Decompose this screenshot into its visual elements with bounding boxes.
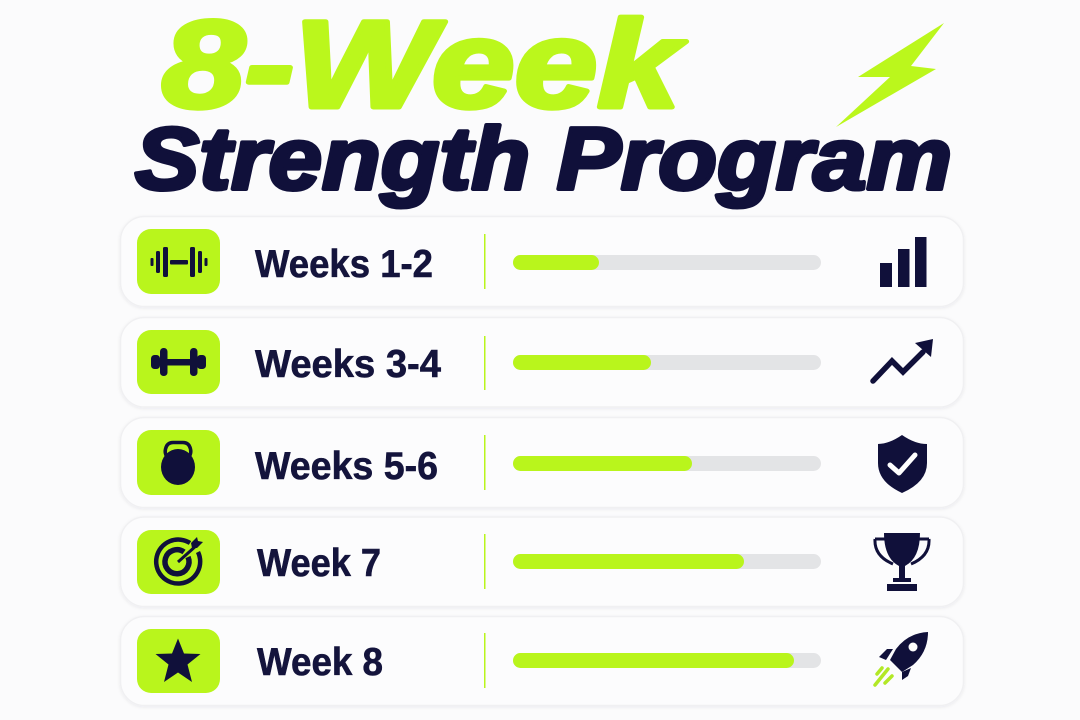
icon: shield with check	[878, 435, 927, 493]
row card	[120, 616, 964, 706]
icon: trophy	[875, 533, 929, 591]
panel: Week 7	[120, 517, 964, 606]
progress bar	[484, 435, 821, 490]
progress bar	[484, 336, 821, 390]
label: Weeks 1-2: Weeks 1-2	[255, 243, 433, 286]
icon: bar chart	[880, 237, 926, 287]
title: 8-Week: 8-Week	[162, 0, 687, 134]
icon: rising arrow	[873, 339, 933, 381]
row card	[120, 318, 964, 407]
label: Weeks 5-6: Weeks 5-6	[255, 445, 438, 488]
progress bar	[484, 633, 821, 688]
icon: star	[137, 629, 220, 693]
icon: dumbbell	[137, 330, 220, 394]
label: Week 7: Week 7	[257, 542, 381, 585]
label: Weeks 3-4: Weeks 3-4	[255, 343, 441, 386]
icon: target	[137, 530, 220, 594]
label: Week 8: Week 8	[257, 641, 383, 684]
panel: Week 8	[120, 616, 964, 706]
progress bar	[484, 534, 821, 589]
icon: kettlebell	[137, 430, 220, 495]
progress bar	[484, 234, 821, 289]
row card	[120, 517, 964, 606]
row card	[120, 418, 964, 508]
icon: rocket	[875, 632, 928, 685]
title: Strength Program: Strength Program	[135, 109, 952, 208]
icon: barbell	[137, 229, 220, 294]
panel: Weeks 3-4	[120, 318, 964, 407]
panel: Weeks 5-6	[120, 418, 964, 508]
panel: Weeks 1-2	[120, 216, 964, 306]
icon: lightning bolt	[836, 23, 944, 127]
row card	[120, 216, 964, 306]
